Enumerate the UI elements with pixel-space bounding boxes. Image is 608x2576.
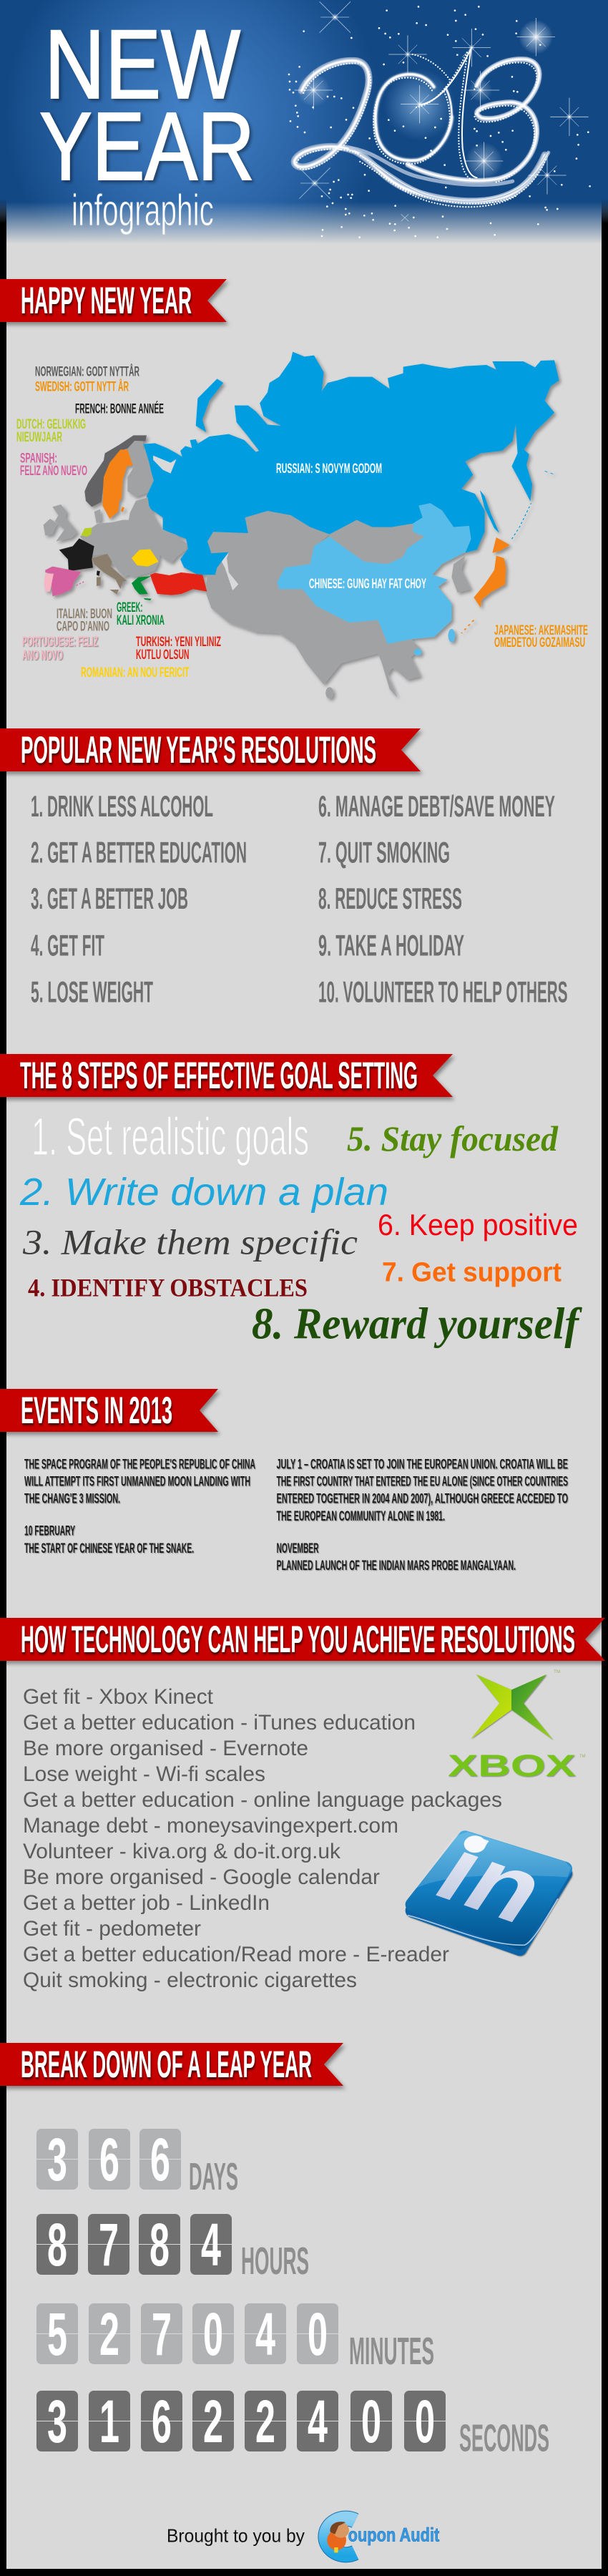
list: technology helpers: Get fit - pedometer [23,1917,201,1941]
counter: 31622400 seconds: 0 [361,2388,381,2455]
list: technology helpers: Manage debt - moneysavingexpert.com [23,1814,398,1838]
counter: 8784 hours: 8 [47,2211,67,2278]
greeting labels [16,363,588,680]
step 1: 1. Set realistic goals [31,1107,309,1166]
events: left column: WILL ATTEMPT ITS FIRST UNMANNED MOON LANDING WITH [24,1474,250,1490]
counter: 8784 hours: 7 [99,2211,119,2278]
list: technology helpers: Be more organised - Google calendar [23,1865,380,1889]
counter: 527040 minutes: 2 [99,2301,119,2368]
section banner: Happy New Year [0,279,227,322]
list: popular resolutions: 5. LOSE WEIGHT [31,975,153,1009]
label: Russian: RUSSIAN: S NOVYM GODOM [276,461,382,477]
title: NEW YEAR: YEAR [39,92,255,200]
list: technology helpers: Get a better education/Read more - E-reader [23,1943,449,1966]
counter: 31622400 seconds: 4 [308,2388,328,2455]
text: HOURS [241,2240,309,2283]
counter: 366 days: 6 [150,2126,170,2193]
text block: events in 2013 [24,1457,568,1574]
list: technology helpers: Be more organised - Evernote [23,1737,308,1760]
counter: 31622400 seconds: 1 [99,2388,119,2455]
label: Spanish [20,451,87,479]
counter: 8784 hours [36,2211,309,2283]
counter: 8784 hours: 8 [149,2211,170,2278]
icon: LinkedIn logo: in [417,1819,567,1942]
section banner: Popular New Year's Resolutions [0,728,421,771]
icon: Xbox logo: TM [579,1755,586,1759]
label: Spanish: FELIZ AÑO NUEVO [20,462,87,479]
counter: 527040 minutes: 5 [47,2301,67,2368]
title: NEW YEAR [39,10,255,200]
label: Greek: GREEK: [117,600,143,615]
list: popular resolutions: 8. REDUCE STRESS [318,882,462,915]
list: popular resolutions: 3. GET A BETTER JOB [31,882,188,915]
list: technology helpers: Get fit - Xbox Kinect [23,1685,214,1709]
events: left column: 10 FEBRUARY [24,1523,75,1539]
counter: 366 days: 6 [99,2126,119,2193]
section banner: Events in 2013: EVENTS IN 2013 [21,1390,172,1432]
list: technology helpers: Get a better education - online language packages [23,1788,502,1812]
label: Dutch: DUTCH: GELUKKIG [16,416,86,432]
label: French: FRENCH: BONNE ANNÉE [75,401,164,417]
label: Turkish: KUTLU OLSUN [136,647,189,663]
list: popular resolutions: 1. DRINK LESS ALCOHOL [31,789,213,823]
section banner: Break Down of a Leap Year [0,2043,343,2086]
icon: Xbox logo [448,1669,586,1783]
counter: 31622400 seconds: 6 [152,2388,172,2455]
events: right column: THE EUROPEAN COMMUNITY ALONE IN 1981. [276,1508,445,1524]
list: popular resolutions [31,789,568,1009]
icon: Xbox logo: TM [554,1669,561,1674]
events: left column [24,1457,255,1556]
counter: 31622400 seconds: 0 [415,2388,435,2455]
label: Japanese [494,623,588,650]
Europe shapes [44,435,207,600]
label: Romanian: ROMANIAN: AN NOU FERICIT [81,665,190,680]
logo: Coupon Audit [325,2519,439,2555]
label: Italian: CAPO D'ANNO [57,619,109,635]
counter: 527040 minutes: 0 [203,2301,223,2368]
events: left column: THE START OF CHINESE YEAR OF THE SNAKE. [24,1541,194,1556]
text: DAYS [189,2155,238,2198]
list: technology helpers: Volunteer - kiva.org & do-it.org.uk [23,1840,341,1863]
map: Eurasia with new year greetings [16,352,588,698]
counter: 31622400 seconds: 3 [47,2388,67,2455]
section banner: Events in 2013 [0,1389,218,1432]
label: Portuguese: PORTUGUESE: FELIZ [22,634,98,650]
list: technology helpers: Get a better job - LinkedIn [23,1891,270,1915]
section banner: Happy New Year: HAPPY NEW YEAR [21,280,192,322]
step 5: 5. Stay focused [347,1118,559,1158]
title: NEW YEAR: NEW [44,10,240,119]
counter: 366 days [36,2126,238,2198]
counter: 31622400 seconds: 2 [255,2388,275,2455]
step 2: 2. Write down a plan [19,1171,388,1214]
icon: Xbox logo: XBOX [448,1749,577,1783]
label: Chinese: CHINESE: GUNG HAY FAT CHOY [309,576,426,592]
counter: 31622400 seconds: 2 [203,2388,223,2455]
counter: 366 days: 3 [47,2126,67,2193]
events: right column [276,1457,568,1574]
list: popular resolutions: 7. QUIT SMOKING [318,836,450,869]
counter: 527040 minutes: 7 [152,2301,172,2368]
events: right column: NOVEMBER [276,1541,319,1556]
counter: 527040 minutes: 0 [308,2301,328,2368]
list: popular resolutions: 4. GET FIT [31,929,104,962]
subtitle: infographic: infographic [72,186,214,235]
label: Dutch: NIEUWJAAR [16,429,62,445]
counter: 527040 minutes: 4 [255,2301,275,2368]
list: popular resolutions: 9. TAKE A HOLIDAY [318,929,464,962]
step 7: 7. Get support [382,1258,562,1288]
step 8: 8. Reward yourself [252,1300,582,1349]
step 6: 6. Keep positive [378,1208,578,1241]
counter: 527040 minutes [36,2301,434,2373]
list: the 8 goal setting steps [19,1107,582,1349]
list: technology helpers: Get a better education - iTunes education [23,1711,416,1735]
events: left column: THE SPACE PROGRAM OF THE PEOPLE'S REPUBLIC OF CHINA [24,1457,255,1473]
list: technology helpers: Lose weight - Wi-fi scales [23,1762,265,1786]
footer: brought to you by: Brought to you by [167,2525,305,2547]
label: Swedish: SWEDISH: GOTT NYTT ÅR [35,378,129,395]
label: Greek [117,600,165,628]
label: Turkish [136,634,221,663]
step 4: 4. IDENTIFY OBSTACLES [28,1274,308,1302]
list: technology helpers [23,1685,502,1992]
list: popular resolutions: 2. GET A BETTER EDUCATION [31,836,247,869]
label: Norwegian: NORWEGIAN: GODT NYTTÅR [35,363,139,380]
label: Turkish: TURKISH: YENI YILINIZ [136,634,221,650]
counter: 31622400 seconds [36,2388,549,2460]
step 3: 3. Make them specific [22,1222,358,1262]
events: left column: THE CHANG'E 3 MISSION. [24,1491,120,1507]
Asia shapes [144,352,559,698]
label: Portuguese [22,634,98,663]
list: technology helpers: Quit smoking - electronic cigarettes [23,1968,357,1992]
label: Italian: ITALIAN: BUON [57,606,112,622]
text: MINUTES [349,2330,434,2373]
label: Spanish: SPANISH: [20,451,57,467]
logo: Coupon Audit: oupon Audit [348,2524,439,2545]
label: Portuguese: ANO NOVO [22,648,63,663]
section banner: Break Down of a Leap Year: BREAK DOWN OF A LEAP YEAR [21,2044,312,2086]
label: Greek: KALI XRONIA [117,613,165,628]
label: Dutch [16,416,86,445]
label: Italian [57,606,112,635]
counter: 8784 hours: 4 [201,2211,221,2278]
artwork: sparkling 2013 [289,1,590,238]
map shapes [44,352,559,698]
